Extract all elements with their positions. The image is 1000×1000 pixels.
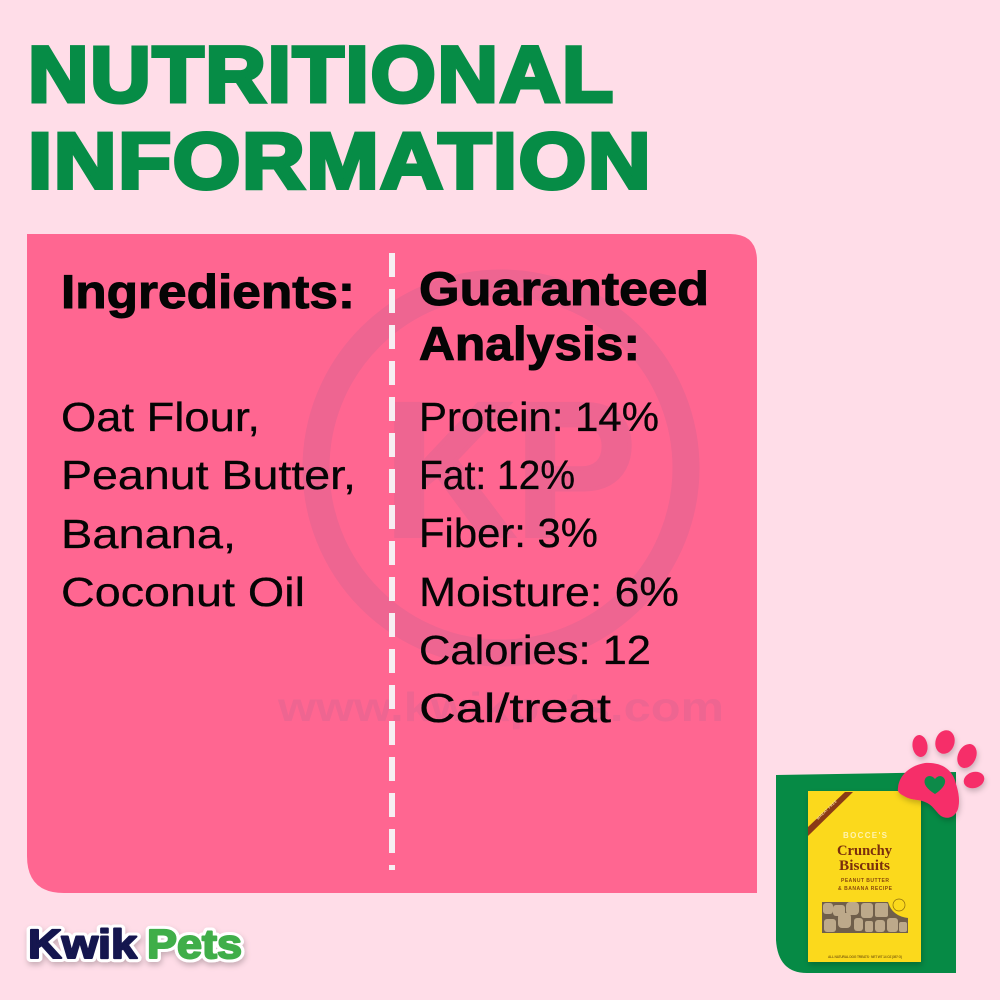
- green backing: [776, 772, 956, 973]
- guaranteed analysis list: Fiber: 3%: [419, 510, 598, 556]
- product bag: BOCCE'S: [843, 831, 888, 840]
- panel: nutrition card: [27, 234, 757, 893]
- product bag: & BANANA RECIPE: [838, 886, 893, 892]
- ingredients list: [61, 394, 356, 615]
- guaranteed analysis heading: Guaranteed: [419, 262, 709, 315]
- watermark: KP logo: [277, 283, 724, 730]
- ingredients list: Coconut Oil: [61, 569, 305, 615]
- guaranteed analysis list: Fat: 12%: [419, 452, 575, 498]
- title: INFORMATION: [28, 117, 651, 205]
- watermark: KP logo: www.kwikpets.com: [277, 684, 724, 730]
- guaranteed analysis list: Cal/treat: [419, 685, 612, 731]
- product bag: Biscuits: [839, 858, 890, 874]
- watermark: KP logo: KP: [384, 362, 636, 577]
- guaranteed analysis heading: Analysis:: [419, 317, 640, 370]
- logo: Kwik Pets: Kwik: [28, 921, 137, 967]
- ingredients list: Oat Flour,: [61, 394, 260, 440]
- guaranteed analysis heading: [419, 262, 709, 370]
- logo: Kwik Pets: Kwik: [28, 921, 137, 967]
- logo: Kwik Pets: [28, 921, 242, 967]
- guaranteed analysis list: Moisture: 6%: [419, 569, 679, 615]
- product bag: Crunchy: [837, 843, 893, 859]
- product bag: ALL NATURAL DOG TREATS · NET WT 14 OZ (397 G): [828, 955, 902, 959]
- logo: Kwik Pets: Pets: [147, 921, 242, 967]
- ingredients heading: Ingredients:: [61, 265, 355, 318]
- ingredients list: Peanut Butter,: [61, 452, 356, 498]
- dashed divider: [389, 253, 395, 866]
- icon: paw: [898, 728, 986, 818]
- guaranteed analysis list: Calories: 12: [419, 627, 651, 673]
- title: [28, 31, 651, 205]
- logo: Kwik Pets: Pets: [147, 921, 242, 967]
- title: NUTRITIONAL: [28, 31, 613, 119]
- product bag: [808, 791, 921, 962]
- ingredients list: Banana,: [61, 511, 236, 557]
- guaranteed analysis list: [419, 394, 679, 731]
- product bag: PEANUT BUTTER: [841, 878, 889, 884]
- guaranteed analysis list: Protein: 14%: [419, 394, 659, 440]
- product bag: WHEAT FREE: [816, 799, 838, 821]
- product card: [776, 728, 986, 973]
